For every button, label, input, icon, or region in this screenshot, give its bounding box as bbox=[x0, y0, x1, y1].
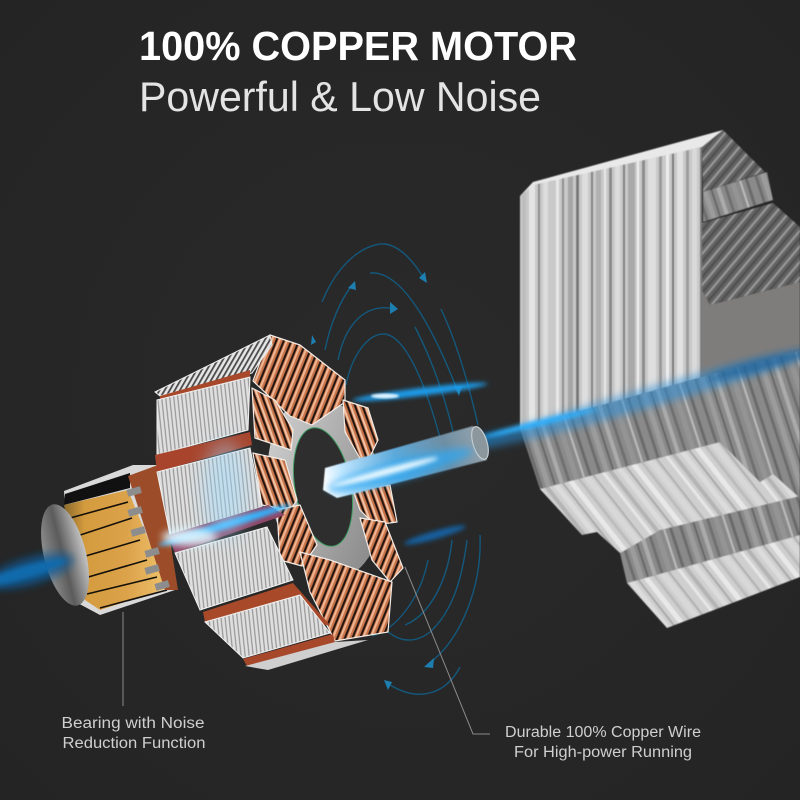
label: copper wire bbox=[505, 724, 701, 761]
bearing end cap bbox=[32, 499, 98, 611]
stator lower light ledge bbox=[540, 442, 800, 553]
stator middle inner wall bbox=[702, 282, 800, 377]
shaft tip bbox=[468, 425, 492, 461]
light beam across stator bbox=[469, 342, 800, 458]
pole four bbox=[175, 527, 293, 610]
leader line: bearing bbox=[122, 612, 124, 706]
label: bearing: Bearing with Noise bbox=[62, 715, 204, 732]
title: 100% COPPER MOTOR bbox=[139, 23, 577, 69]
label: bearing bbox=[62, 715, 206, 752]
commutator copper windings bbox=[128, 465, 178, 590]
rotor end ring bbox=[254, 387, 396, 587]
copper strip five bbox=[243, 634, 335, 666]
bearing gold bars bbox=[64, 490, 168, 610]
copper strip one bbox=[160, 370, 250, 400]
magnetic field arcs with arrows bbox=[311, 244, 480, 694]
label: bearing: Reduction Function bbox=[62, 735, 206, 752]
stator bottom light face bbox=[627, 535, 800, 628]
laminated steel stator block bbox=[520, 130, 800, 628]
label: copper wire: Durable 100% Copper Wire bbox=[505, 724, 701, 741]
coil ends bbox=[252, 335, 403, 641]
stator upper right hatch bbox=[702, 130, 765, 192]
copper strip two bbox=[155, 432, 252, 472]
stator lower inner wall bbox=[702, 351, 800, 498]
pole two bbox=[157, 377, 250, 455]
stator dark band bbox=[620, 496, 800, 583]
rotor assembly bbox=[32, 335, 403, 670]
stator upper band bbox=[703, 172, 773, 222]
light beam behind stator bbox=[0, 380, 511, 591]
bearing black band bbox=[64, 473, 130, 505]
light glow along shaft and rotor bbox=[0, 440, 475, 597]
lower edge bbox=[245, 640, 368, 670]
leader line: copper wire bbox=[405, 567, 490, 734]
stator lower bevel face bbox=[520, 377, 720, 489]
commutator bearing bbox=[32, 465, 178, 615]
copper strip three bbox=[168, 505, 285, 553]
subtitle: Powerful & Low Noise bbox=[139, 73, 541, 120]
pole three bbox=[157, 448, 262, 535]
stator dark hatched recess bbox=[702, 203, 800, 305]
top pole bbox=[155, 335, 272, 396]
bearing silver sleeve bbox=[64, 465, 175, 615]
stator top edge bbox=[520, 130, 723, 196]
label: copper wire: For High-power Running bbox=[514, 744, 692, 761]
rotor hole bbox=[285, 423, 361, 551]
commutator pins bbox=[126, 486, 170, 591]
copper strip four bbox=[203, 583, 330, 625]
pole five bbox=[205, 595, 330, 658]
rotor lamination poles and copper strips bbox=[155, 335, 368, 670]
rotor shaft bbox=[323, 425, 492, 498]
stator front face bbox=[520, 147, 702, 428]
